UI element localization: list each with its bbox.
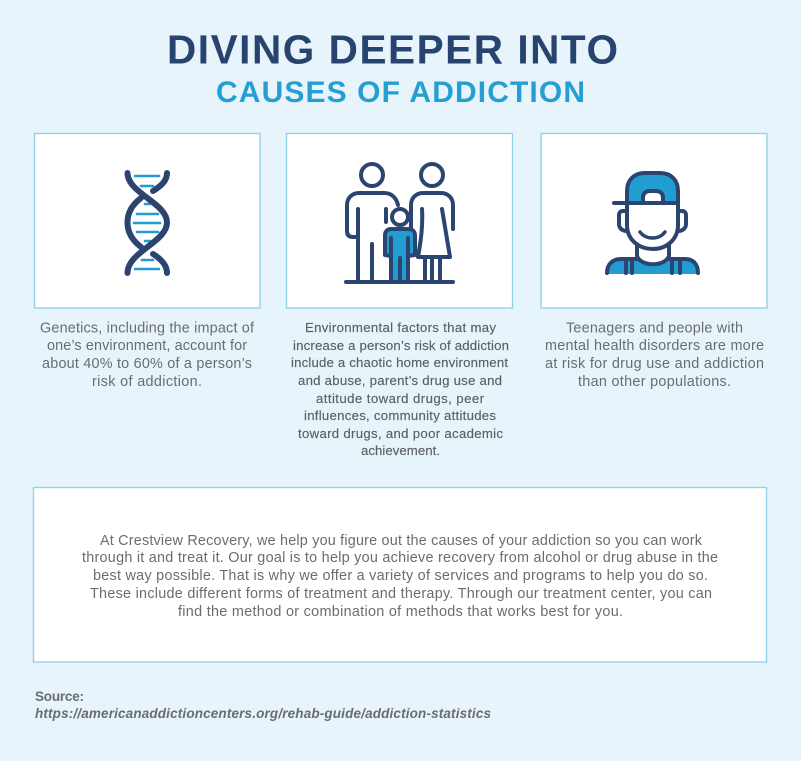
environment text: and abuse, parent’s drug use and — [298, 373, 502, 388]
panel: crestview recovery summary — [34, 488, 766, 662]
icon: teenager with cap — [607, 173, 698, 274]
environment text — [291, 320, 509, 458]
heading: diving deeper into: DIVING DEEPER INTO — [167, 26, 618, 72]
source citation: https://americanaddictioncenters.org/rehab-guide/addiction-statistics — [35, 706, 491, 721]
populations text: than other populations. — [578, 374, 731, 390]
summary text: At Crestview Recovery, we help you figure out the causes of your addiction so you can work — [100, 533, 703, 549]
source citation: Source: — [35, 689, 84, 704]
title block — [167, 26, 618, 109]
genetics icon card — [34, 134, 260, 308]
panel: environment — [286, 134, 512, 458]
environment text: influences, community attitudes — [304, 408, 496, 423]
environment text: toward drugs, and poor academic — [298, 426, 503, 441]
genetics text: one’s environment, account for — [47, 338, 247, 354]
populations text: at risk for drug use and addiction — [545, 356, 764, 372]
icon: dna helix — [128, 173, 167, 273]
summary text: find the method or combination of methods that works best for you. — [178, 604, 623, 620]
genetics text: Genetics, including the impact of — [40, 320, 255, 336]
environment text: attitude toward drugs, peer — [316, 391, 485, 406]
populations text — [545, 320, 764, 390]
icon: family — [346, 164, 453, 282]
populations text: Teenagers and people with — [566, 320, 743, 336]
panel: genetics — [34, 134, 260, 390]
environment text: include a chaotic home environment — [291, 355, 508, 370]
environment text: increase a person’s risk of addiction — [293, 338, 509, 353]
subheading: causes of addiction: CAUSES OF ADDICTION — [216, 76, 585, 109]
environment text: achievement. — [361, 443, 440, 458]
source citation — [35, 689, 491, 721]
summary text: through it and treat it. Our goal is to help you achieve recovery from alcohol or drug abuse in the — [82, 550, 718, 566]
populations icon card — [541, 134, 767, 308]
genetics text — [40, 320, 255, 390]
summary text — [82, 533, 718, 620]
panel: populations at risk — [541, 134, 767, 390]
genetics text: risk of addiction. — [92, 374, 202, 390]
populations text: mental health disorders are more — [545, 338, 764, 354]
summary text: best way possible. That is why we offer a variety of services and programs to help you do so. — [93, 568, 708, 584]
environment text: Environmental factors that may — [305, 320, 496, 335]
summary card — [34, 488, 766, 662]
environment icon card — [286, 134, 512, 308]
genetics text: about 40% to 60% of a person’s — [42, 356, 252, 372]
summary text: These include different forms of treatment and therapy. Through our treatment center, you can — [90, 586, 712, 602]
